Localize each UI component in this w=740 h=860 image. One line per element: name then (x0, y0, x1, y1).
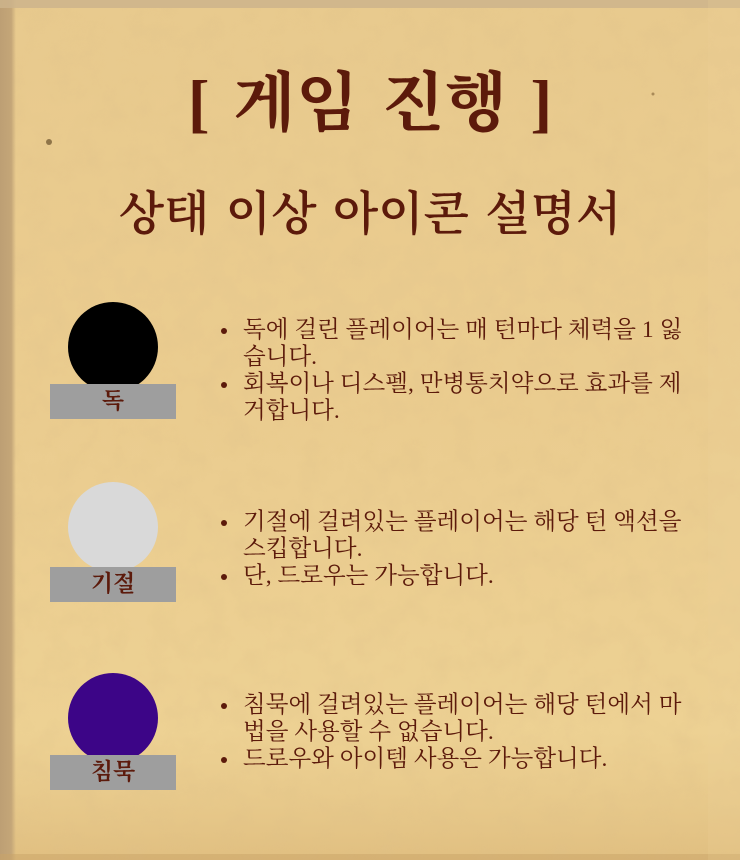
description: poison: 회복이나 디스펠, 만병통치약으로 효과를 제 (243, 371, 681, 397)
label: stun (50, 567, 176, 602)
description: poison: 거합니다. (243, 398, 340, 424)
label: stun: 기절 (91, 571, 135, 596)
description: poison (221, 316, 682, 424)
description: silence: 법을 사용할 수 없습니다. (243, 719, 494, 745)
status row: silence (50, 673, 682, 790)
description: stun: 스킵합니다. (243, 536, 362, 562)
icon: stun circle (68, 482, 158, 572)
description: silence: 드로우와 아이템 사용은 가능합니다. (243, 746, 607, 772)
title: [ 게임 진행 ] (188, 68, 552, 140)
subtitle: 상태 이상 아이콘 설명서 (119, 189, 621, 241)
description: poison: 독에 걸린 플레이어는 매 턴마다 체력을 1 잃 (243, 317, 682, 343)
status row: poison (50, 302, 682, 424)
description: stun: 단, 드로우는 가능합니다. (243, 563, 494, 589)
icon: poison circle (68, 302, 158, 392)
label: poison (50, 384, 176, 419)
description: silence: 침묵에 걸려있는 플레이어는 해당 턴에서 마 (243, 692, 681, 718)
label: silence (50, 755, 176, 790)
description: stun (221, 508, 681, 589)
label: poison: 독 (102, 388, 124, 413)
description: silence (221, 692, 682, 772)
description: stun: 기절에 걸려있는 플레이어는 해당 턴 액션을 (243, 509, 681, 535)
status row: stun (50, 482, 681, 602)
label: silence: 침묵 (91, 759, 135, 784)
icon: silence circle (68, 673, 158, 763)
description: poison: 습니다. (243, 344, 317, 370)
